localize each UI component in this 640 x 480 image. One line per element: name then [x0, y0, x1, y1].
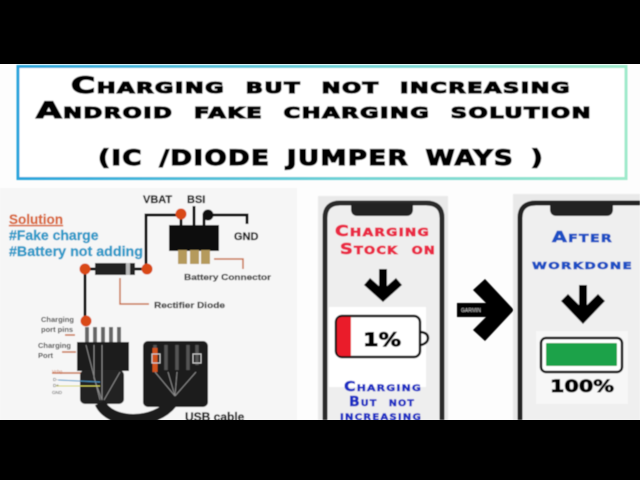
- pin labels: D+: [53, 383, 59, 388]
- pin labels: GND: [52, 390, 63, 395]
- usb cable label: USB cable: [185, 410, 245, 424]
- charging stuck text: [335, 222, 436, 258]
- hashtag notes: #Fake charge: [9, 227, 99, 243]
- charging but not increasing text: increasing: [340, 409, 422, 424]
- solution heading: Solution: [9, 212, 63, 227]
- phone body: [325, 203, 442, 420]
- 100 percent: 100%: [550, 377, 614, 397]
- charging but not increasing text: Charging: [344, 380, 422, 395]
- arrow between phones: [457, 279, 514, 341]
- rail labels: BSI: [187, 194, 205, 206]
- charging stuck text: Stock on: [340, 240, 436, 258]
- wires: [85, 215, 247, 321]
- low battery icon: [336, 316, 428, 357]
- pin labels: Vchg: [52, 369, 63, 374]
- hashtag notes: #Battery not adding: [9, 243, 143, 259]
- title banner: [18, 66, 626, 178]
- notch: [351, 203, 413, 216]
- title line 1: Charging but not increasing: [71, 74, 571, 99]
- title line 3: (IC /DIODE JUMPER WAYS ): [98, 146, 544, 170]
- charging port: [56, 327, 129, 404]
- after workdone text: After: [552, 228, 613, 246]
- panel: circuit diagram: [0, 188, 297, 424]
- callout arrows: [52, 259, 243, 373]
- panel: circuit diagram: Charging: [41, 315, 74, 324]
- panel: circuit diagram: port pins: [41, 325, 73, 334]
- diagram labels: [154, 272, 272, 310]
- full battery icon: [541, 338, 622, 372]
- hashtag notes: [9, 227, 143, 259]
- phone body: [522, 205, 640, 420]
- after workdone text: workdone: [532, 257, 633, 273]
- cable: [100, 403, 172, 420]
- battery connector: [169, 206, 219, 264]
- usb connector: [143, 341, 208, 407]
- rail labels: GND: [234, 231, 258, 243]
- pin labels: D-: [53, 377, 58, 382]
- diagram labels: Rectifier Diode: [154, 300, 225, 310]
- rectifier diode: [95, 263, 135, 275]
- notch: [550, 203, 613, 216]
- panel: phone before: [318, 196, 448, 424]
- charging but not increasing text: But not: [349, 395, 415, 410]
- panel: phone after: [513, 194, 640, 420]
- pin labels: [52, 369, 63, 395]
- charging but not increasing text: [340, 380, 422, 424]
- diagram labels: Battery Connector: [184, 272, 272, 282]
- rail labels: [143, 194, 258, 243]
- down arrow: [364, 269, 402, 302]
- bottom letterbox: [0, 420, 640, 480]
- title line 2: Android fake charging solution: [36, 99, 592, 124]
- junction dots: [80, 208, 186, 326]
- 1 percent: 1%: [363, 329, 401, 351]
- after workdone text: [532, 228, 633, 273]
- panel: circuit diagram: Charging: [38, 341, 71, 350]
- down arrow: [561, 285, 605, 324]
- arrow label: GARMIN: [461, 308, 481, 314]
- charging stuck text: Charging: [335, 222, 430, 240]
- panel: circuit diagram: Port: [38, 351, 54, 360]
- rail labels: VBAT: [143, 194, 172, 206]
